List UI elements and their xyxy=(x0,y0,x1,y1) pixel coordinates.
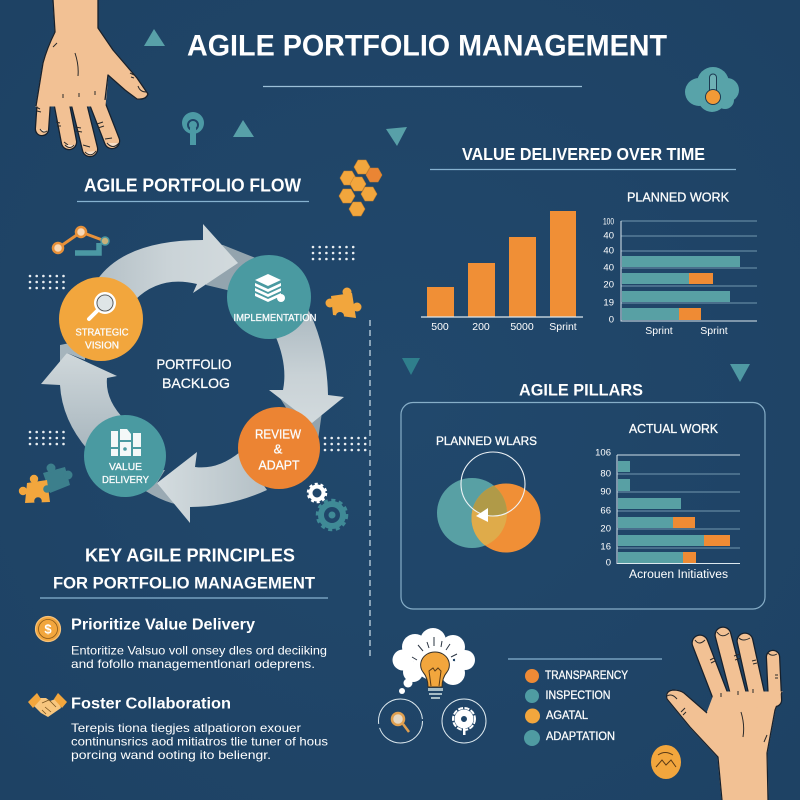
icon: orange puzzle right xyxy=(326,288,362,320)
icon: thermometer cloud xyxy=(685,67,739,112)
bar chart: planned work: 19 xyxy=(603,298,614,308)
bar chart: actual work: ACTUAL WORK xyxy=(629,422,719,436)
icon: triangle pointing down right xyxy=(730,364,750,382)
bar chart: planned work: 20 xyxy=(603,280,614,290)
principle: foster collaboration xyxy=(28,693,328,762)
principle: prioritize value delivery: and fofollo managementlonarl odeprens. xyxy=(71,657,315,671)
bar chart: actual work: 0 xyxy=(606,558,611,568)
principle: foster collaboration: Terepis tiona tiegjes atlpatioron exouer xyxy=(71,721,301,735)
bar chart: actual work: 66 xyxy=(600,506,611,516)
principle: prioritize value delivery: Entoritize Valsuo voll onsey dles ord deciiking xyxy=(71,644,327,658)
legend: agile pillars: TRANSPARENCY xyxy=(545,670,628,682)
bar chart: value delivered: 500 xyxy=(431,321,449,333)
icon: handshake xyxy=(28,693,67,717)
heading: agile pillars: AGILE PILLARS xyxy=(519,380,643,400)
bar chart: planned work: PLANNED WORK xyxy=(627,190,729,204)
principle: foster collaboration: Foster Collaboration xyxy=(71,696,231,712)
bar chart: value delivered: Sprint xyxy=(549,321,577,333)
heading: agile portfolio flow: AGILE PORTFOLIO FLOW xyxy=(84,174,301,196)
heading: key agile principles xyxy=(40,544,328,598)
node: implementation xyxy=(227,255,316,339)
bar chart: planned work: 40 xyxy=(603,246,614,256)
decorative dot grids xyxy=(30,247,366,450)
icon: triangle middle xyxy=(233,120,254,137)
bar chart: value delivered: 5000 xyxy=(510,321,534,333)
icon: gears xyxy=(308,484,346,530)
arrow: value to vision xyxy=(41,340,125,450)
principle: prioritize value delivery: Prioritize Value Delivery xyxy=(71,616,255,634)
icon: dollar coin xyxy=(36,616,60,642)
node: review and adapt: & xyxy=(274,442,283,456)
center label: portfolio backlog: BACKLOG xyxy=(162,375,230,391)
principle: foster collaboration: porcing wand ooting ito beliengr. xyxy=(71,748,271,762)
icon: top-left hand xyxy=(36,0,148,155)
legend: agile pillars xyxy=(508,659,662,746)
bar chart: actual work: 80 xyxy=(600,468,611,480)
chart: agile portfolio flow cycle xyxy=(41,224,344,523)
center label: portfolio backlog: PORTFOLIO xyxy=(156,356,232,372)
panel: agile pillars xyxy=(401,402,765,609)
icon: triangle pointing down left xyxy=(402,358,420,375)
heading: key agile principles: KEY AGILE PRINCIPLES xyxy=(85,544,295,566)
principle: foster collaboration: continunsrics aod mitiatros tlie tuner of hous xyxy=(71,734,328,748)
bar chart: planned work: 100 xyxy=(603,216,614,228)
node: value delivery: VALUE xyxy=(109,461,142,473)
center label: portfolio backlog xyxy=(156,356,232,391)
heading: key agile principles: FOR PORTFOLIO MANAGEMENT xyxy=(53,574,316,592)
bar chart: actual work: 20 xyxy=(600,524,611,534)
bar chart: actual work xyxy=(595,422,740,581)
node: review and adapt: REVIEW xyxy=(255,426,302,442)
bar chart: planned work: 40 xyxy=(603,230,614,242)
arrow: implementation to review xyxy=(269,305,344,440)
bar chart: actual work: 16 xyxy=(600,542,611,552)
bar chart: actual work: Acrouen Initiatives xyxy=(629,569,728,581)
node: implementation: IMPLEMENTATION xyxy=(234,312,316,324)
node: review and adapt xyxy=(238,407,320,489)
bar chart: planned work: 0 xyxy=(609,314,614,326)
venn diagram: planned wlars: PLANNED WLARS xyxy=(436,434,537,448)
node: strategic vision: STRATEGIC xyxy=(76,328,128,338)
arrow: review to value xyxy=(138,452,267,523)
arrow: vision to implementation xyxy=(97,224,258,300)
icon: circled magnifier xyxy=(378,699,422,743)
legend: agile pillars: INSPECTION xyxy=(546,690,610,702)
icon: orange egg face xyxy=(651,745,681,779)
bar chart: planned work: Sprint xyxy=(700,325,728,337)
icon: keyhole pin xyxy=(182,112,204,145)
node: strategic vision: VISION xyxy=(85,340,119,352)
node: value delivery xyxy=(84,415,166,497)
icon: bottom-right hand xyxy=(667,632,782,800)
legend: agile pillars: ADAPTATION xyxy=(546,731,615,743)
principle: prioritize value delivery xyxy=(36,616,327,671)
icon: dollar coin: $ xyxy=(44,622,52,636)
icon: circled flower xyxy=(442,699,486,743)
bar chart: planned work xyxy=(603,190,757,337)
icon: triangle top xyxy=(144,29,165,46)
bar chart: value delivered xyxy=(421,211,583,333)
bar chart: actual work: 106 xyxy=(595,448,611,458)
icon: puzzle pieces left xyxy=(19,464,72,505)
bar chart: value delivered: 200 xyxy=(472,321,490,333)
icon: hexagon cluster xyxy=(339,160,382,216)
icon: triangle pointing down xyxy=(386,127,407,146)
title: AGILE PORTFOLIO MANAGEMENT xyxy=(187,30,667,62)
icon: line nodes xyxy=(53,227,109,253)
venn diagram: planned wlars xyxy=(436,434,540,552)
node: value delivery: DELIVERY xyxy=(102,474,149,486)
heading: value delivered over time: VALUE DELIVERED OVER TIME xyxy=(462,144,705,164)
bar chart: planned work: 40 xyxy=(603,262,614,274)
bar chart: actual work: 90 xyxy=(600,486,611,498)
node: strategic vision xyxy=(59,277,143,361)
legend: agile pillars: AGATAL xyxy=(546,710,589,722)
node: review and adapt: ADAPT xyxy=(258,458,300,472)
bar chart: planned work: Sprint xyxy=(645,325,673,337)
icon: idea cloud with bulb xyxy=(392,628,475,699)
